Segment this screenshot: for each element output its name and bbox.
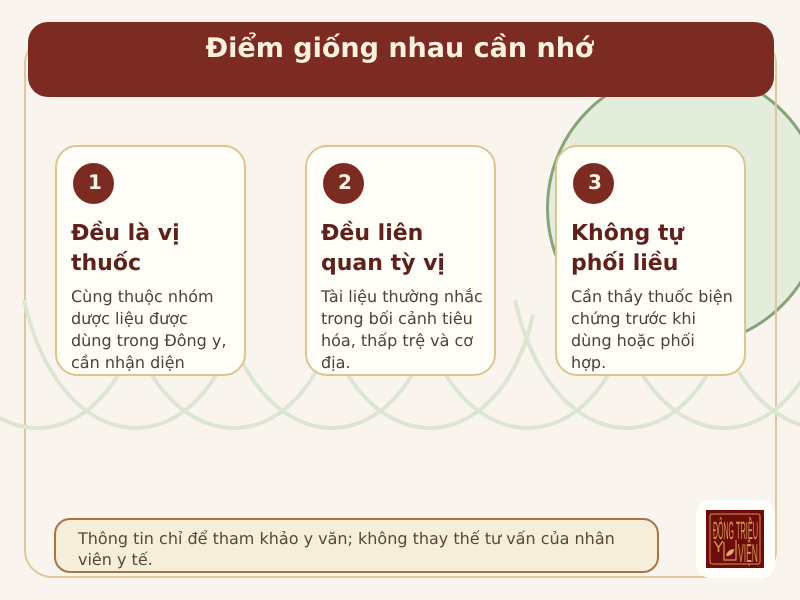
card 2 heading bbox=[321, 220, 445, 276]
card 3 heading: phối liều bbox=[571, 251, 678, 276]
card 1 text bbox=[71, 287, 226, 372]
card 1 text: Cùng thuộc nhóm bbox=[71, 287, 214, 306]
card 3 text: hợp. bbox=[571, 353, 606, 372]
card 2 bbox=[305, 145, 496, 376]
number badge 1 bbox=[73, 163, 114, 204]
number badge 3 bbox=[573, 163, 614, 204]
card 2 text: địa. bbox=[321, 353, 350, 372]
number badge 1: 1 bbox=[88, 170, 102, 194]
number badge 2 bbox=[323, 163, 364, 204]
card 3 heading: Không tự bbox=[571, 221, 684, 246]
card 3 text: dùng hoặc phối bbox=[571, 331, 695, 350]
card 3 text: Cần thầy thuốc biện bbox=[571, 287, 733, 306]
card 1 heading: Đều là vị bbox=[71, 221, 180, 246]
card 2 text: hóa, thấp trệ và cơ bbox=[321, 331, 473, 350]
disclaimer text bbox=[78, 529, 615, 569]
card 2 text: trong bối cảnh tiêu bbox=[321, 309, 473, 328]
card 2 heading: Đều liên bbox=[321, 221, 423, 246]
card 3 text: chứng trước khi bbox=[571, 309, 696, 328]
number badge 2: 2 bbox=[338, 170, 352, 194]
card 3 bbox=[555, 145, 746, 376]
card 2 text bbox=[320, 287, 483, 372]
card 1 heading bbox=[71, 220, 180, 276]
number badge 3: 3 bbox=[588, 170, 602, 194]
card 3 heading bbox=[571, 221, 684, 276]
card 1 text: dùng trong Đông y, bbox=[71, 331, 226, 350]
title: Điểm giống nhau cần nhớ bbox=[206, 33, 593, 64]
decorative circle bbox=[546, 69, 800, 347]
logo bbox=[696, 500, 775, 578]
card 3 text bbox=[571, 287, 733, 372]
card 1 heading: thuốc bbox=[71, 251, 141, 276]
card 1 text: dược liệu được bbox=[71, 309, 188, 328]
card 2 heading: quan tỳ vị bbox=[321, 251, 445, 276]
card 1 bbox=[55, 145, 246, 376]
disclaimer text: viên y tế. bbox=[78, 550, 153, 569]
disclaimer text: Thông tin chỉ để tham khảo y văn; không thay thế tư vấn của nhân bbox=[78, 529, 615, 548]
disclaimer note bbox=[54, 518, 659, 573]
card 1 text: cần nhận diện bbox=[71, 353, 185, 372]
logo mark: Y bbox=[713, 539, 724, 556]
card 2 text: Tài liệu thường nhắc bbox=[321, 287, 483, 306]
header banner bbox=[28, 22, 774, 97]
logo mark bbox=[706, 510, 764, 568]
